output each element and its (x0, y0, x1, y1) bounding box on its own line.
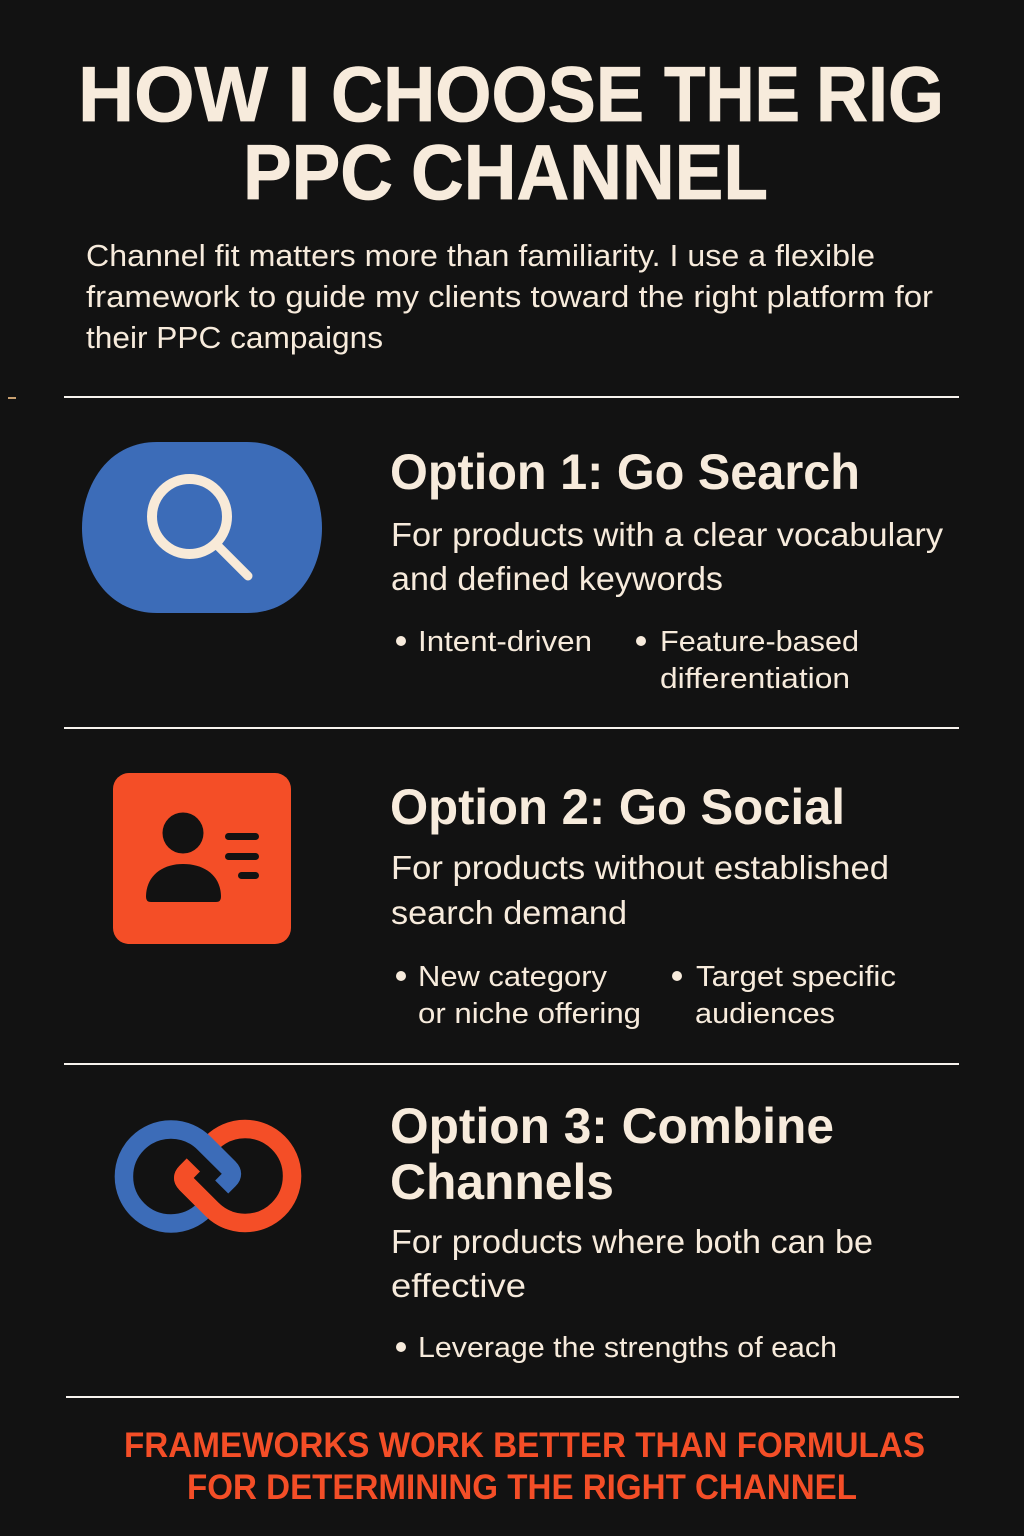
description: option 1: For products with a clear vocabulary (391, 516, 944, 553)
title: RIG (816, 50, 944, 138)
bullets: option 2 (396, 961, 896, 1030)
footer callout (124, 1426, 925, 1507)
panel: option 1 (82, 442, 944, 695)
description: option 3: effective (391, 1267, 526, 1304)
description: option 3 (391, 1223, 873, 1304)
icon: social profile (113, 773, 291, 944)
title: HOW (78, 50, 268, 138)
intro text (86, 238, 933, 355)
title: CHANNEL (411, 128, 768, 216)
bullets: option 2: New category (418, 961, 608, 993)
bullets: option 2: audiences (695, 998, 835, 1030)
description: option 2: search demand (391, 894, 627, 931)
description: option 2 (391, 849, 889, 931)
description: option 3: For products where both can be (391, 1223, 873, 1260)
title: THE (664, 50, 800, 138)
description: option 2: For products without established (391, 849, 889, 886)
heading: option 2: Option 2: Go Social (390, 779, 845, 835)
title: I (287, 50, 311, 138)
heading: option 3: Option 3: Combine (390, 1098, 834, 1154)
title: CHOOSE (331, 50, 644, 138)
heading: option 3: Channels (390, 1154, 614, 1210)
bullets: option 1: Intent-driven (418, 626, 592, 658)
bullets: option 2: Target specific (696, 961, 896, 993)
icon: search (82, 442, 322, 613)
intro text: Channel fit matters more than familiarity. I use a flexible (86, 238, 875, 273)
footer callout: FOR DETERMINING THE RIGHT CHANNEL (187, 1468, 857, 1507)
description: option 1: and defined keywords (391, 560, 723, 597)
heading: option 3 (390, 1098, 834, 1210)
footer callout: FRAMEWORKS WORK BETTER THAN FORMULAS (124, 1426, 925, 1465)
panel: option 2 (113, 773, 896, 1030)
bullets: option 2: or niche offering (418, 998, 641, 1030)
title (78, 50, 944, 216)
intro text: framework to guide my clients toward the right platform for (86, 279, 933, 314)
icon: linked channels (124, 1129, 292, 1224)
panel: option 3 (124, 1098, 873, 1364)
bullets: option 1 (396, 626, 859, 695)
bullets: option 1: differentiation (660, 663, 850, 695)
intro text: their PPC campaigns (86, 320, 383, 355)
description: option 1 (391, 516, 944, 597)
bullet: option 3: Leverage the strengths of each (418, 1332, 837, 1364)
title: PPC (243, 128, 393, 216)
heading: option 1: Option 1: Go Search (390, 444, 860, 500)
bullets: option 1: Feature-based (660, 626, 859, 658)
